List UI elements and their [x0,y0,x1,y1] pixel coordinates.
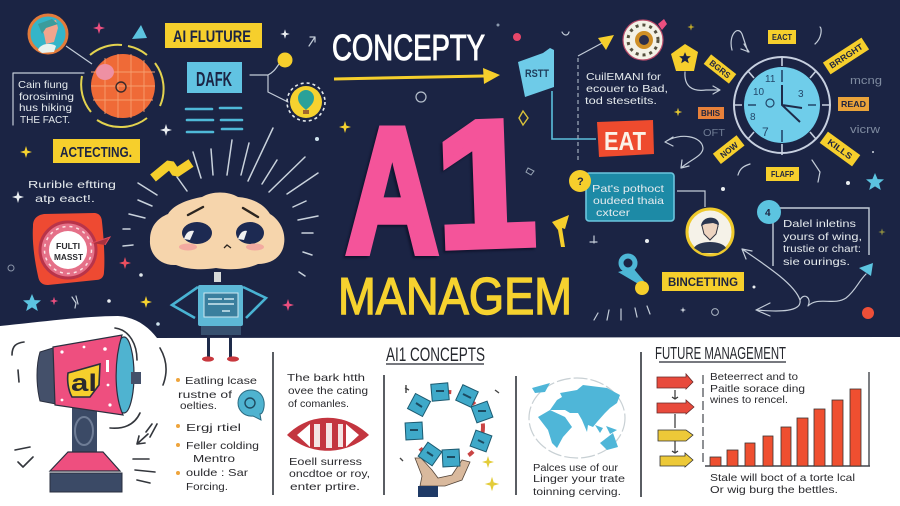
text block: column note: ecouer to Bad, [586,83,668,95]
list: feature bullets: oulde : Sar [186,467,249,479]
text block: column note [585,71,668,107]
megaphone illustration [12,328,166,492]
list: feature bullets: Forcing. [186,481,228,493]
text block: middle column top: of comanles. [288,398,349,410]
label: actecting: ACTECTING. [60,144,132,161]
text block: chart note: Beteerrect and to [710,371,798,383]
text block: rumble: Rurible eftting [28,179,116,191]
text block: middle column top: ovee the cating [288,385,368,397]
big title: A1: A [346,91,439,290]
clock: 8 [750,112,756,123]
text block: map caption: toinning cerving. [533,486,621,498]
radiating lines around brain [123,128,318,276]
list: feature bullets: Eatling lcase [185,375,257,387]
text block: middle column bottom: oncdtoe or roy, [289,468,370,480]
dark background [0,0,900,338]
text block: chart note [709,371,805,406]
white lower panel [0,316,900,506]
clock labels: BGRS [707,58,733,81]
icon: red eye diagram [287,418,369,451]
clock labels [698,30,869,181]
curly arrows lower right [594,249,874,320]
icon: red dial [33,213,110,285]
clock squiggles [703,27,882,182]
icon: red dial: MASST [54,252,84,262]
label: actecting [53,139,140,163]
label: bincetting: BINCETTING [668,277,738,289]
clock: 10 [753,87,765,98]
callout: data note: 4 [765,208,771,219]
text block: chart caption: Or wig burg the bettles. [710,484,838,496]
text flag: RSTT [518,48,596,139]
diagram: ring of cards held by hand [400,383,499,497]
icon: person portrait [687,209,733,255]
callout: data note: trustie or chart: [783,243,861,255]
big title: A1: 1 [432,83,538,285]
clock labels: BRRGHT [827,41,865,71]
callout: data note [757,200,869,268]
label card: DAFK: DAFK [196,69,232,91]
decor: top-left sparkles [8,22,319,326]
callout: teal note: Pat's pothoct [592,183,664,195]
text block: chart note: Paitle sorace ding [710,383,805,395]
text block: middle column top: The bark htth [287,372,365,384]
list: feature bullets: Feller colding [186,440,259,452]
text block: globe note: Cain fiung [18,79,68,91]
list: feature bullets: Ergj rtiel [186,422,241,434]
clock: 3 [798,89,804,100]
clock squiggles: mcng [850,75,882,87]
callout: teal note: oudeed thaia [593,195,664,207]
callout: data note: sie ourings. [783,256,850,268]
clock: 7 [762,125,769,139]
text block: middle column bottom: Eoell surress [289,456,362,468]
clock labels: READ [841,99,866,109]
list: feature bullets: rustne of [178,389,232,401]
clock: 11 [765,74,776,85]
text block: rumble: atp eact!. [35,193,95,205]
connector with yellow node [250,52,292,102]
label: bincetting [662,272,744,291]
curved arrows near EAT [665,136,703,168]
text block: globe note [13,73,84,126]
text block: map caption [533,462,625,498]
clock labels: EACT [772,32,793,42]
clock labels: KILLS [826,137,855,161]
clock labels: FLAFP [771,169,794,179]
clock labels: BHIS [701,108,720,118]
label: AI future: AI FLUTURE [173,27,251,46]
bar chart [703,372,870,466]
label: AI future [165,23,262,48]
icons: right sparkles [721,151,886,236]
text block: chart caption [710,472,855,496]
list lines [186,108,242,132]
heading: AI concepts: AI1 CONCEPTS [386,345,485,366]
divider lines [273,352,641,497]
callout: teal note: ? [577,176,584,188]
icon: pentagon star [671,44,720,94]
list: feature bullets [176,375,259,493]
megaphone illustration: al [71,370,97,397]
callout: data note: yours of wing, [783,231,862,243]
text block: map caption: Palces use of our [533,462,619,474]
flow arrows [657,374,694,467]
callout: teal note [569,170,705,221]
icon: gear wheel [623,19,667,60]
icon: avatar badge [29,15,92,64]
text flag: RSTT: RSTT [525,68,549,80]
icon: speech bubble [238,390,264,420]
text block: map caption: Linger your trate [533,473,625,485]
clock labels: NOW [718,139,741,160]
text block: middle column bottom: enter prtire. [290,481,360,493]
clock squiggles: OFT [703,128,725,139]
text block: globe note: forosiming [19,91,74,103]
character: brain head [150,192,284,269]
text block: globe note: THE FACT. [20,114,70,126]
character: robot body [172,272,266,362]
icon: balloon badge [287,83,325,121]
text block: column note: CuilEMANI for [586,71,662,83]
list: feature bullets: Mentro [193,453,235,465]
heading: future management [655,343,786,363]
text block: globe note: hus hiking [19,102,72,114]
icon: orange globe [81,45,164,127]
heading: future management: FUTURE MANAGEMENT [655,343,786,363]
arrow to gear [578,35,614,160]
icon: key pin [618,256,649,295]
heading: concepty [332,27,500,84]
heading: managem: MANAGEM [338,268,572,326]
label: EAT: EAT [604,126,646,156]
heading: concepty: CONCEPTY [332,27,485,68]
text block: chart note: wines to rencel. [709,394,788,406]
center decor [339,23,695,247]
text block: rumble [28,179,116,205]
callout: data note: Dalel inletins [783,218,856,230]
clock squiggles: vicrw [850,124,880,136]
text block: column note: tod stesetits. [585,95,657,107]
text block: chart caption: Stale will boct of a torte lcal [710,472,855,484]
list: feature bullets: oelties. [180,400,217,412]
big title: A1 [346,83,538,290]
text block: middle column bottom [289,456,370,493]
callout: teal note: cxtcer [596,207,631,219]
label card: DAFK [187,62,242,93]
icon: red dial: FULTI [56,241,80,251]
text block: middle column top [287,372,368,410]
clock [734,57,831,155]
icon: yellow zigzag [153,163,191,178]
diagram: world map [529,378,625,458]
